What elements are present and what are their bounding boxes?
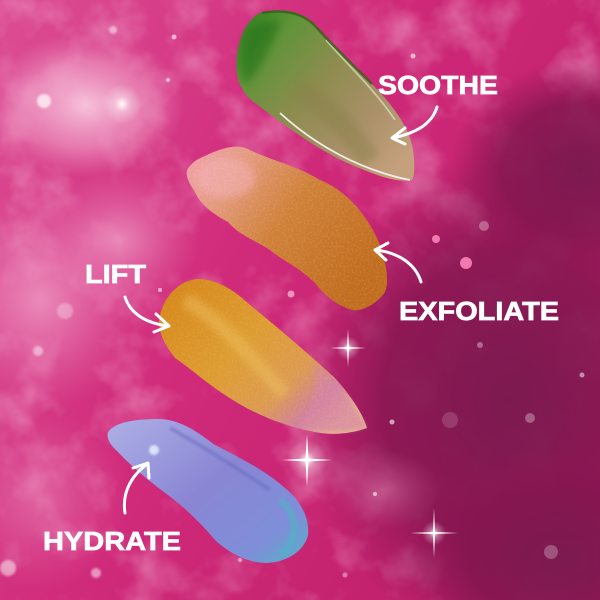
swatch: gold lift cream [159,279,367,434]
swatch: green soothe gel [236,11,414,181]
label: SOOTHE: SOOTHE [378,70,498,100]
label: LIFT: LIFT [85,259,146,289]
arrow: exfoliate [375,243,421,282]
swatch: blue hydrate gel [107,419,308,563]
arrow: hydrate [124,463,149,513]
sparkles [282,329,458,558]
arrow: soothe [392,107,437,144]
arrow: lift [125,297,169,332]
swatch: orange exfoliate scrub [187,147,387,310]
label: HYDRATE: HYDRATE [43,526,181,556]
label: EXFOLIATE: EXFOLIATE [399,296,559,326]
